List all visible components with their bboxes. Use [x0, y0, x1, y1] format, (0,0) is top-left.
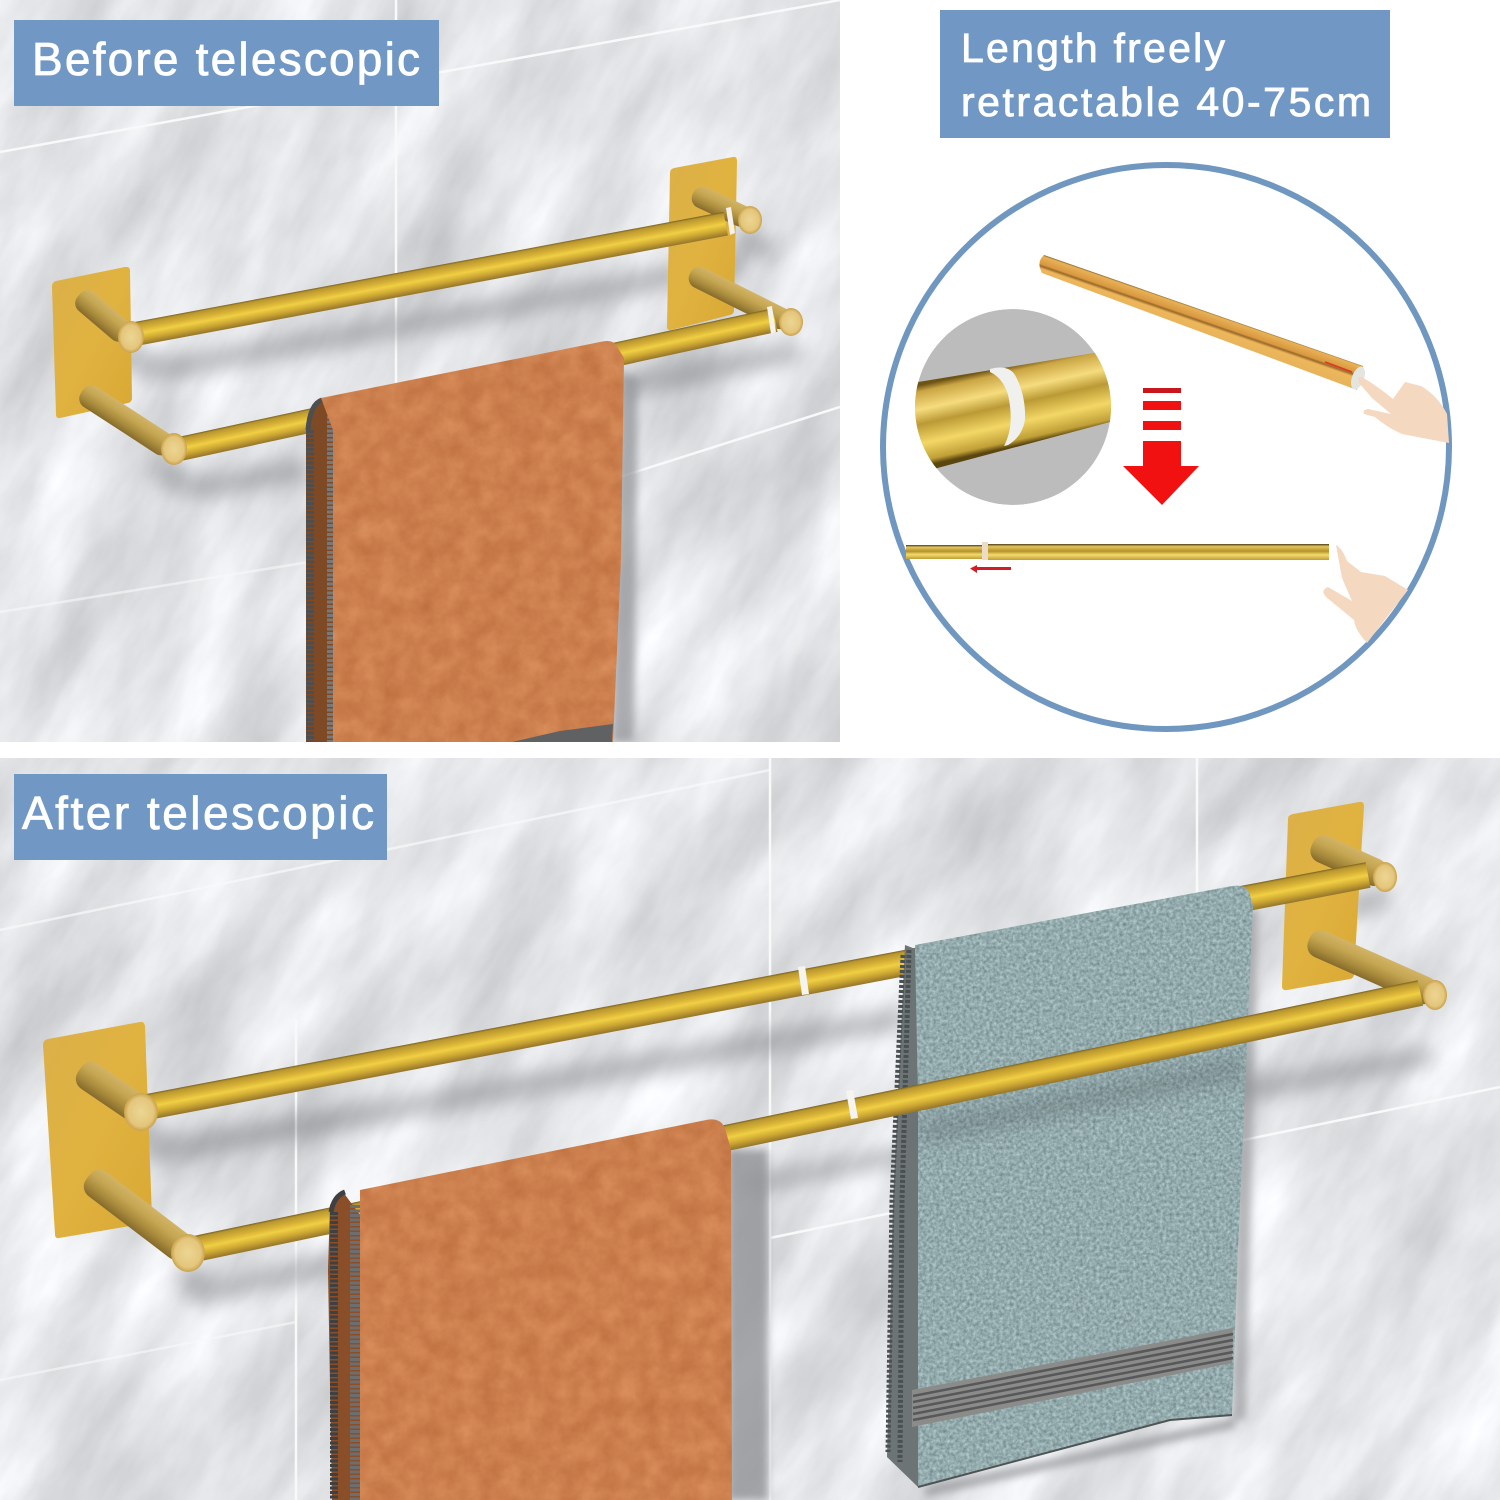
upper rod ring: [798, 966, 809, 995]
hand pushing tilted rod: [1358, 377, 1449, 443]
end caps: [118, 206, 803, 465]
panel: retraction diagram circle: [883, 165, 1449, 729]
towel bottom stripe: [512, 724, 613, 742]
label: length freely retractable: [940, 10, 1390, 138]
label: length freely retractable: retractable 40-75cm: [961, 79, 1371, 125]
rack shadows: [110, 225, 806, 500]
label: after telescopic: [14, 774, 387, 860]
hand pushing retracted rod: [1323, 545, 1408, 643]
lower rod ring: [846, 1090, 858, 1119]
marble wall: [0, 0, 840, 742]
tilted rod being pushed: [1039, 255, 1368, 391]
upper right standoff: [1310, 836, 1384, 886]
right wall plate: [667, 157, 737, 330]
left wall plate: [43, 1022, 152, 1238]
orange towel: [321, 341, 624, 742]
red stripes and down arrow: [1123, 388, 1199, 505]
towel shadows: [728, 910, 1258, 1500]
upper left standoff: [75, 290, 128, 342]
label: before telescopic: [14, 20, 439, 106]
retracted rod: [906, 542, 1329, 560]
blue towel bottom edge: [918, 1415, 1232, 1487]
panel: before telescopic photo: [0, 0, 840, 742]
right wall plate: [1282, 802, 1364, 990]
blue towel back hem: [887, 945, 918, 1487]
lower rod: [172, 308, 778, 462]
orange towel side hem: [328, 1192, 360, 1500]
rack shadows: [125, 885, 1435, 1310]
telescopic rings: [726, 207, 776, 334]
rod shadow on blue towel: [920, 1055, 1245, 1145]
towel side hem: [306, 398, 333, 742]
lower left standoff: [79, 1165, 197, 1265]
left wall plate: [52, 267, 132, 418]
blue towel stripes: [912, 1328, 1233, 1427]
small red arrow: [970, 565, 1011, 573]
upper right standoff: [692, 186, 747, 227]
label: length freely retractable: Length freely: [961, 25, 1226, 71]
upper left standoff: [71, 1057, 150, 1124]
label: after telescopic: After telescopic: [22, 787, 374, 839]
end caps: [124, 862, 1447, 1272]
panel: after telescopic photo: [0, 758, 1500, 1500]
blue towel: [915, 886, 1253, 1487]
upper rod: [128, 212, 728, 347]
orange towel: [360, 1119, 732, 1500]
inset detail circle: [915, 309, 1111, 505]
label: before telescopic: Before telescopic: [32, 33, 420, 85]
lower rod: [187, 980, 1423, 1263]
lower right standoff: [1304, 927, 1441, 1008]
circle outline: [883, 165, 1449, 729]
marble wall: [0, 758, 1500, 1500]
lower left standoff: [79, 385, 170, 456]
lower right standoff: [688, 266, 786, 330]
upper rod: [140, 862, 1370, 1121]
towel side shadow: [612, 372, 638, 742]
